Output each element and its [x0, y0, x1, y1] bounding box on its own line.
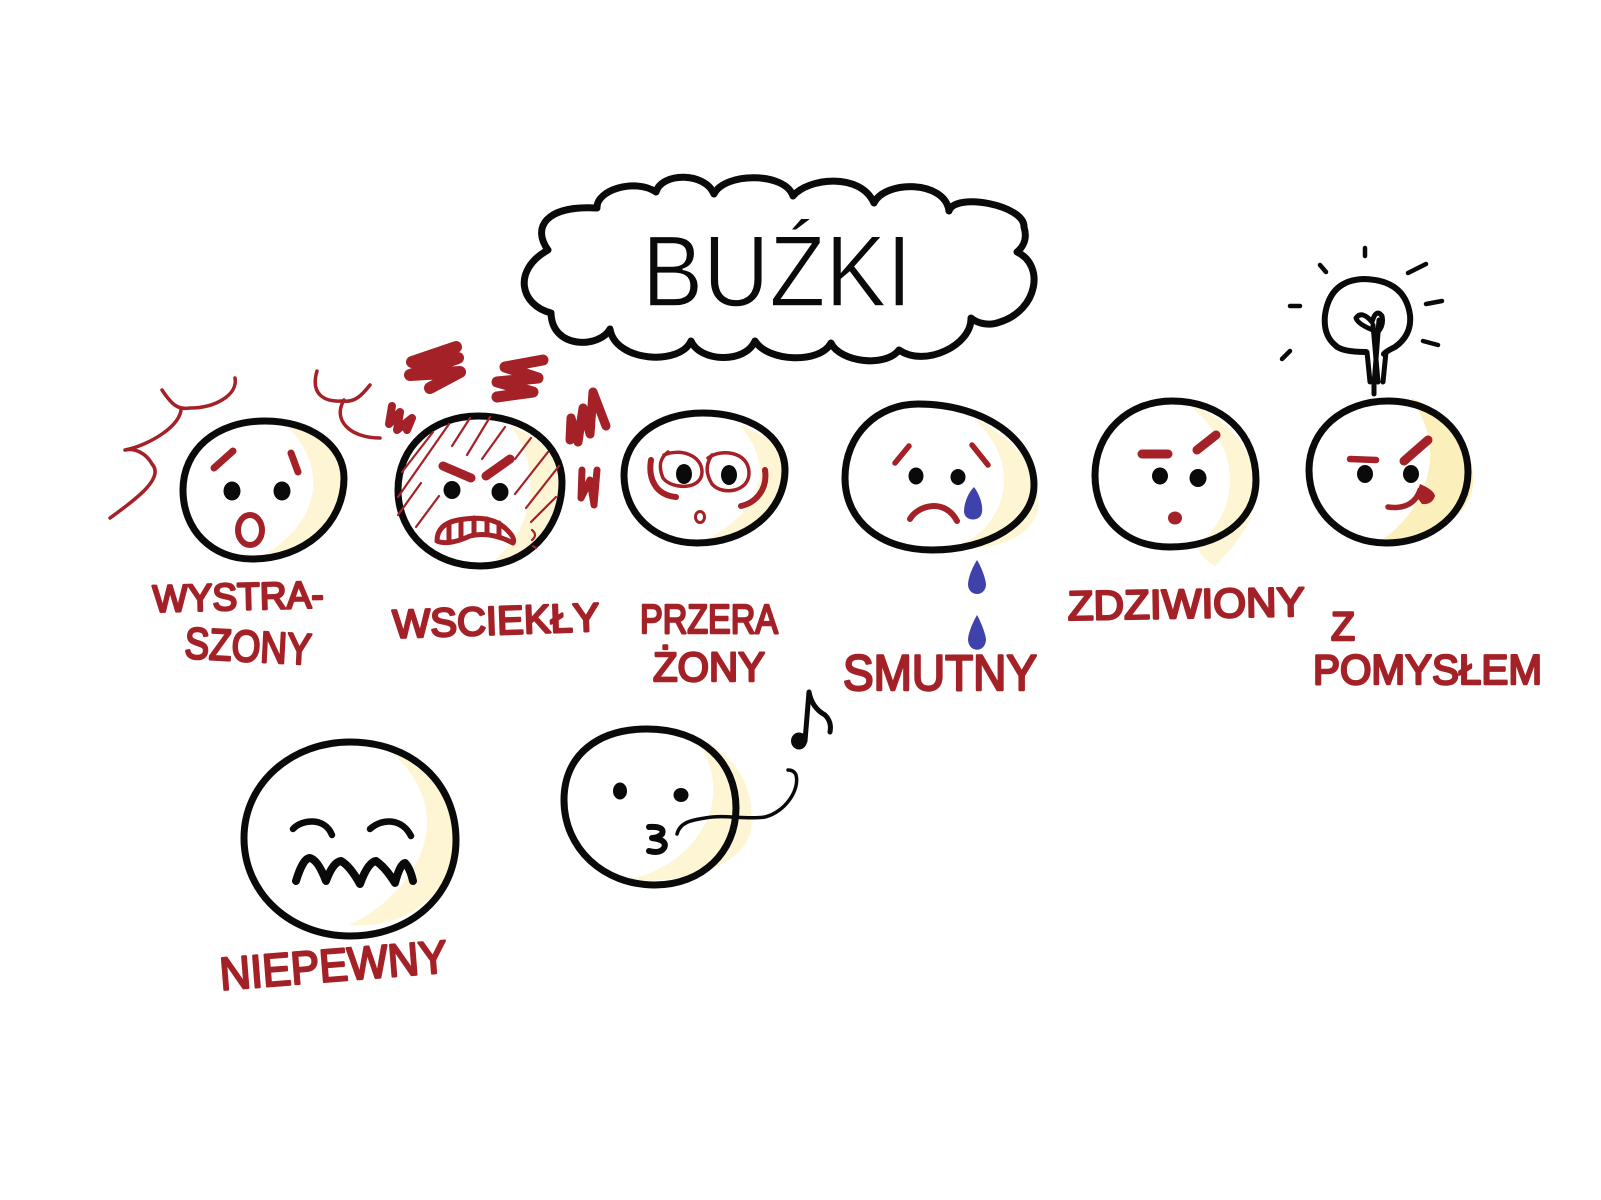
head: [624, 413, 785, 543]
glasses: [660, 452, 749, 491]
smirk: [1388, 490, 1420, 507]
head: [1309, 401, 1468, 543]
title cloud: [524, 177, 1034, 361]
label: przerazony: ŻONY: [653, 644, 765, 690]
eyebrows: [1142, 435, 1216, 454]
cloud outline: [524, 177, 1034, 361]
whistling lips: [649, 827, 665, 852]
head: [398, 416, 562, 566]
label: wystraszony: [152, 575, 324, 675]
head: [183, 421, 344, 559]
eyes: [908, 468, 966, 485]
face: niepewny: [244, 742, 457, 936]
eyebrows: [214, 451, 298, 472]
eyes: [1357, 465, 1419, 483]
label: niepewny: NIEPEWNY: [218, 930, 449, 1000]
label: z pomyslem: [1313, 605, 1542, 693]
shading: [1382, 398, 1473, 541]
mouth: [696, 512, 704, 522]
mouth: [1168, 512, 1182, 524]
label: zdziwiony: ZDZIWIONY: [1067, 579, 1305, 629]
label: wystraszony: SZONY: [183, 619, 313, 675]
head: [244, 742, 456, 936]
eyes: [224, 482, 290, 500]
cheeks: [650, 460, 765, 506]
frown: [910, 506, 957, 521]
shading: [490, 425, 562, 563]
shading: [258, 425, 345, 558]
label: przerazony: [640, 596, 779, 690]
wavy mouth: [296, 858, 413, 884]
eyes: [613, 782, 688, 802]
label: z pomyslem: POMYSŁEM: [1313, 646, 1542, 693]
face: gwizdzacy: [564, 692, 830, 885]
whistle line: [677, 770, 797, 834]
eyebrows: [895, 445, 988, 465]
eyes: [676, 464, 737, 485]
shading: [625, 735, 752, 881]
teeth mouth: [437, 518, 514, 543]
icon: music note: [791, 692, 830, 750]
tears: [964, 487, 986, 650]
closed eyes: [293, 821, 411, 836]
shock lines: [110, 371, 380, 518]
label: wystraszony: WYSTRA-: [152, 575, 324, 621]
rays: [1282, 248, 1442, 359]
shading: [704, 425, 785, 541]
shading: [1188, 404, 1257, 566]
eyebrows: [1350, 459, 1376, 460]
bulb glass: [1325, 279, 1410, 354]
shading: [349, 750, 457, 925]
label: przerazony: PRZERA: [640, 596, 779, 642]
hatching: [398, 417, 559, 548]
filament and base: [1356, 313, 1386, 394]
head: [845, 404, 1034, 550]
head: [1095, 401, 1256, 547]
label: smutny: SMUTNY: [843, 645, 1037, 701]
head: [564, 729, 736, 885]
face: smutny: [845, 404, 1038, 650]
icon: light bulb: [1282, 248, 1442, 394]
anger scribbles: [389, 347, 606, 505]
shading: [950, 418, 1038, 549]
face: wystraszony: [110, 371, 380, 559]
face: wsciekly: [389, 347, 606, 566]
eyebrows: [443, 459, 510, 478]
eyes: [444, 481, 508, 501]
label: wsciekly: WSCIEKŁY: [392, 596, 600, 647]
mouth: [238, 515, 262, 545]
eyes: [1152, 468, 1206, 487]
face: przerazony: [624, 413, 785, 543]
title text: BUŹKI: [642, 216, 912, 328]
face: z pomyslem: [1309, 398, 1473, 543]
face: zdziwiony: [1095, 401, 1257, 566]
label: z pomyslem: Z: [1331, 605, 1355, 649]
